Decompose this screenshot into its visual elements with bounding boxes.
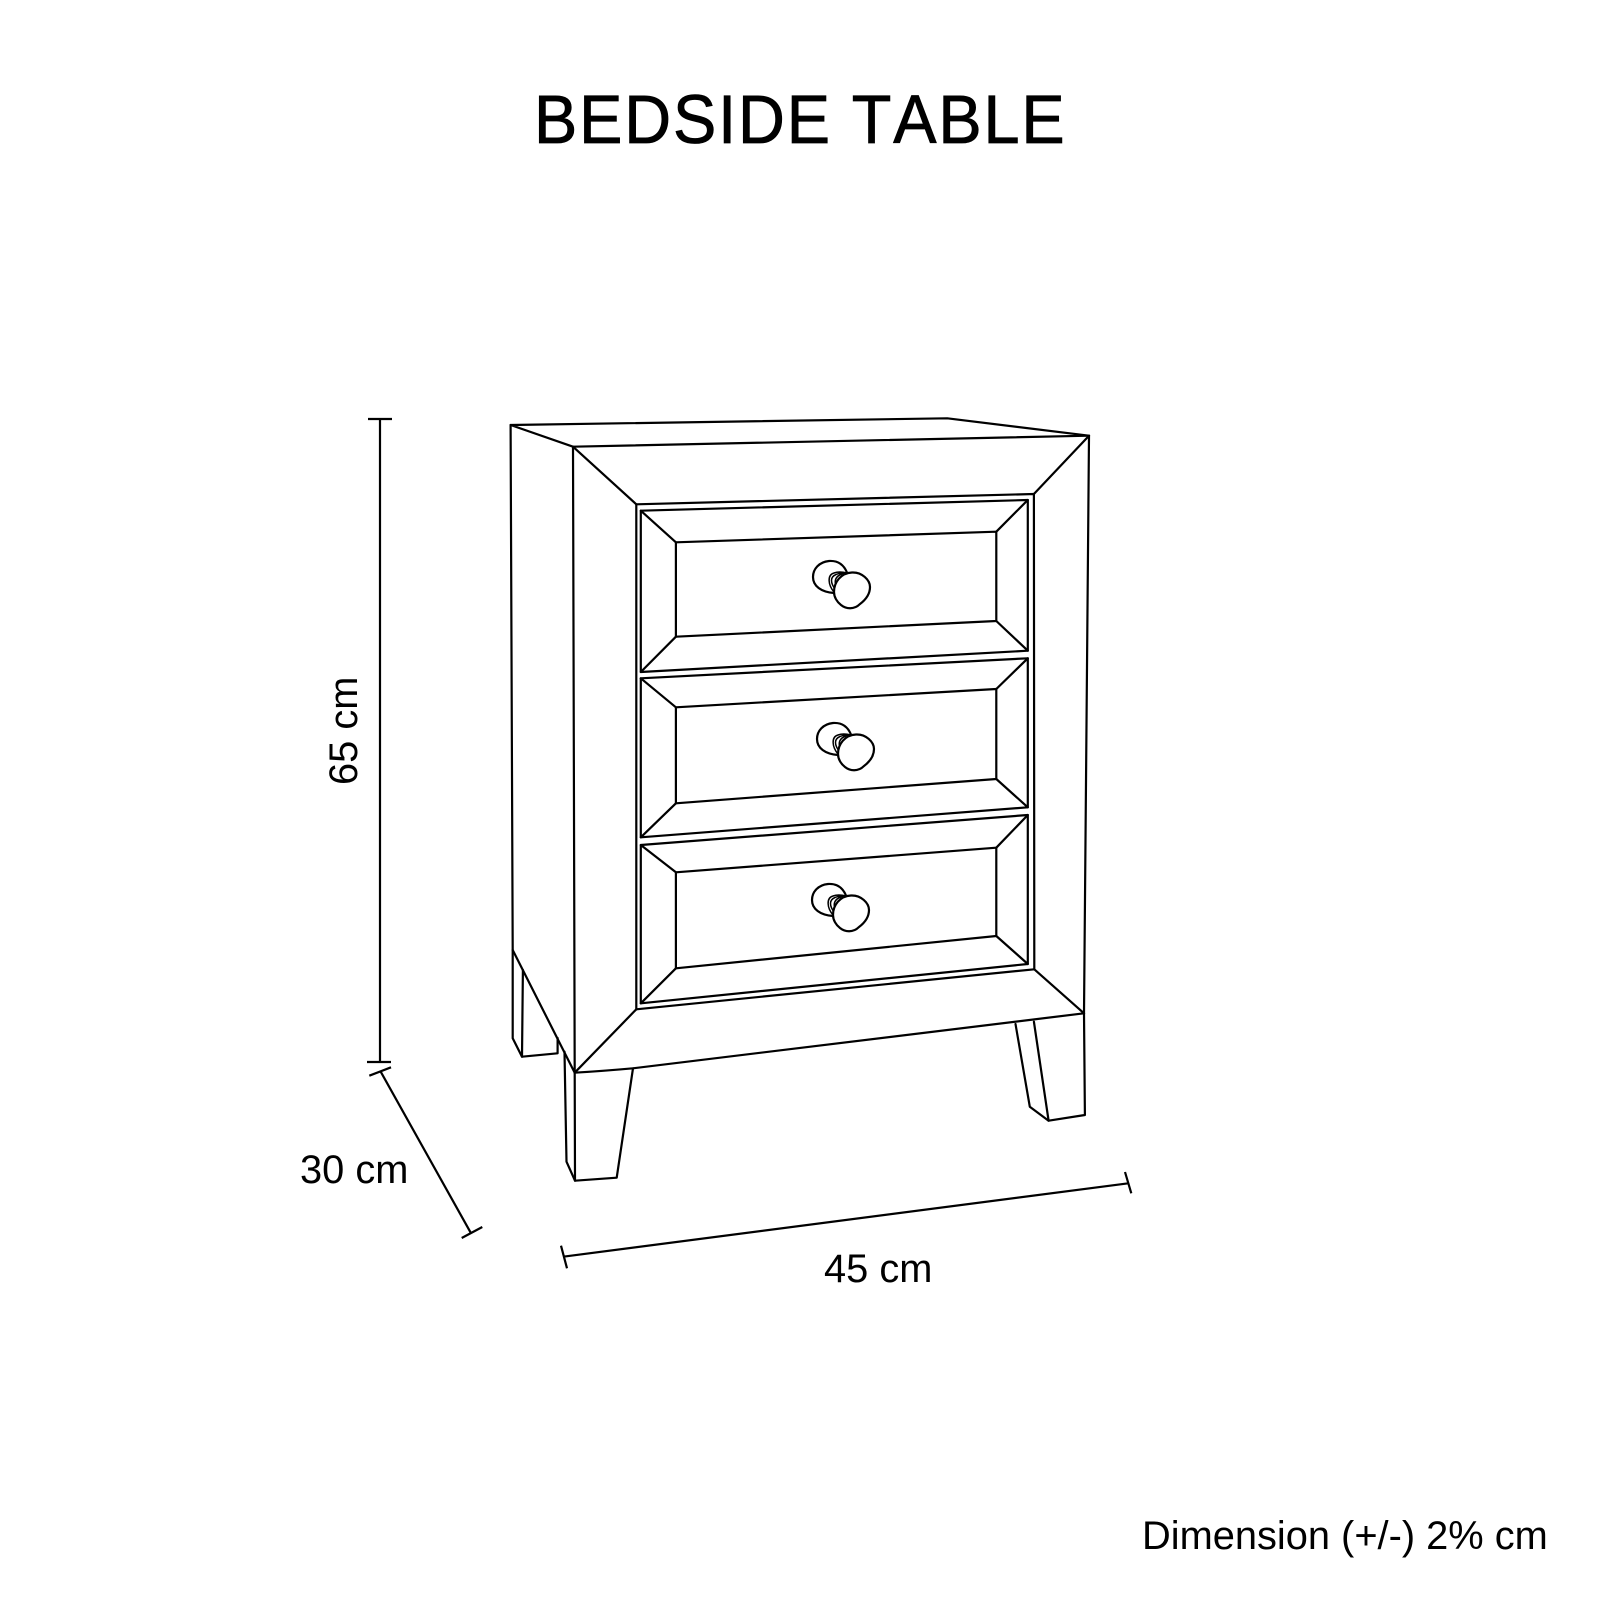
title: TABLE bbox=[852, 81, 1067, 158]
illustration: bedside table bbox=[511, 418, 1089, 1181]
front right leg bbox=[1016, 1013, 1085, 1121]
knob 2 bbox=[817, 723, 874, 770]
dimension: height line bbox=[367, 419, 392, 1062]
drawer 2 bbox=[641, 658, 1028, 837]
back left leg bbox=[513, 950, 558, 1057]
dimension label: 45 cm: 45 cm bbox=[824, 1247, 932, 1291]
front left leg bbox=[564, 1052, 633, 1181]
dimension: depth line bbox=[369, 1067, 482, 1238]
dimension label: 30 cm: 30 cm bbox=[300, 1148, 408, 1192]
drawer 1 bbox=[641, 500, 1028, 672]
cabinet body bbox=[511, 418, 1089, 1073]
dimension label: 65 cm: 65 cm bbox=[322, 677, 366, 785]
dimension: width line bbox=[561, 1172, 1131, 1268]
drawer 3 bbox=[641, 815, 1028, 1003]
title: BEDSIDE bbox=[534, 81, 832, 158]
knob 3 bbox=[812, 884, 869, 931]
knob 1 bbox=[813, 561, 870, 608]
tolerance note: Dimension (+/-) 2% cm bbox=[1142, 1514, 1548, 1558]
